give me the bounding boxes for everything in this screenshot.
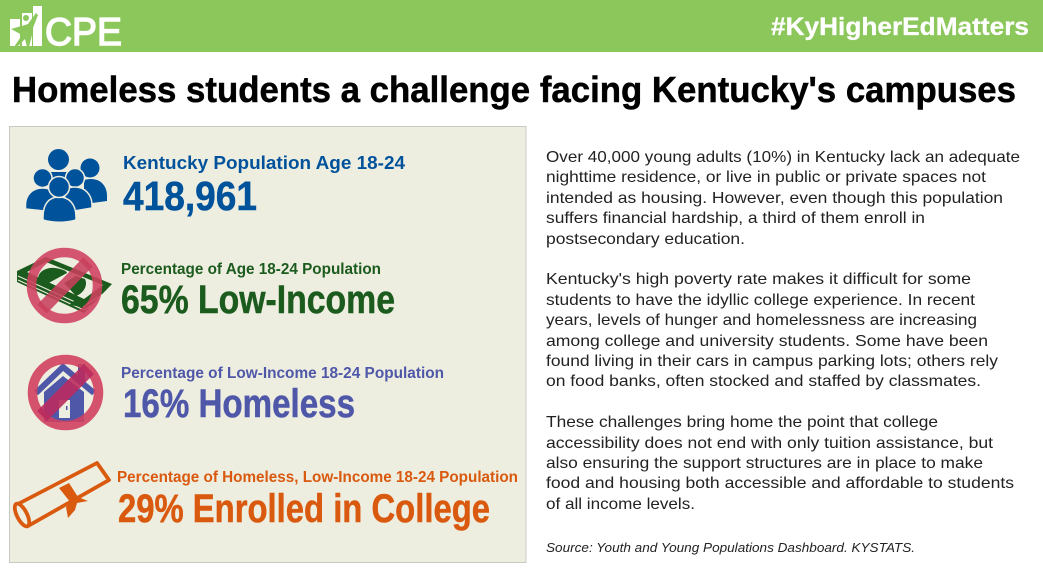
text block: paragraph 3: also ensuring the support structures are in place to make	[546, 455, 983, 472]
value: 65% Low-Income	[121, 278, 395, 322]
text block: paragraph 1: intended as housing. However, even though this population	[546, 190, 1003, 207]
text block: paragraph 3: food and housing both accessible and affordable to students	[546, 475, 1014, 492]
stat: low income	[17, 252, 395, 322]
icon: house with prohibition sign	[32, 360, 98, 426]
value: 418,961	[123, 173, 257, 219]
label: Percentage of Homeless, Low-Income 18-24 Population	[117, 469, 518, 486]
text block: paragraph 2: students to have the idyllic college experience. In recent	[546, 292, 976, 309]
text block: paragraph 2: found living in their cars in campus parking lots; others rely	[546, 353, 998, 370]
CPE logo: CPE	[45, 11, 122, 54]
stat: population	[26, 149, 406, 222]
stat: enrolled	[12, 463, 518, 531]
value: 29% Enrolled in College	[118, 487, 490, 531]
text block: paragraph 1: postsecondary education.	[546, 231, 745, 248]
CPE logo	[10, 6, 122, 54]
text block: paragraph 2: years, levels of hunger and homelessness are increasing	[546, 312, 977, 329]
text block: paragraph 1	[546, 149, 1020, 248]
text block: paragraph 3	[546, 414, 1014, 513]
value: 16% Homeless	[123, 382, 355, 426]
text block: paragraph 2	[546, 271, 998, 390]
label: Percentage of Low-Income 18-24 Population	[121, 365, 444, 382]
text block: paragraph 1: suffers financial hardship, a third of them enroll in	[546, 210, 925, 227]
text block: paragraph 2: Kentucky's high poverty rate makes it difficult for some	[546, 271, 971, 288]
text block: paragraph 1: Over 40,000 young adults (10%) in Kentucky lack an adequate	[546, 149, 1020, 166]
text block: paragraph 3: of all income levels.	[546, 496, 695, 513]
text block: paragraph 1: nighttime residence, or live in public or private spaces not	[546, 169, 987, 186]
label: Percentage of Age 18-24 Population	[121, 261, 381, 278]
hashtag: #KyHigherEdMatters	[771, 13, 1029, 41]
icon: money with prohibition sign	[17, 252, 112, 318]
header banner	[0, 0, 1043, 54]
text block: paragraph 2: among college and university students. Some have been	[546, 333, 988, 350]
icon: diploma	[12, 463, 109, 528]
text block: paragraph 3: accessibility does not end with only tuition assistance, but	[546, 435, 994, 452]
source note: Source: Youth and Young Populations Dashboard. KYSTATS.	[546, 541, 915, 555]
stat: homeless	[32, 360, 444, 426]
title: Homeless students a challenge facing Kentucky's campuses	[12, 69, 1016, 110]
panel: statistics	[10, 126, 526, 562]
icon: group of people	[26, 149, 107, 222]
text block: paragraph 3: These challenges bring home the point that college	[546, 414, 938, 431]
text block: paragraph 2: on food banks, often stocked and staffed by classmates.	[546, 373, 981, 390]
label: Kentucky Population Age 18-24	[123, 152, 406, 173]
